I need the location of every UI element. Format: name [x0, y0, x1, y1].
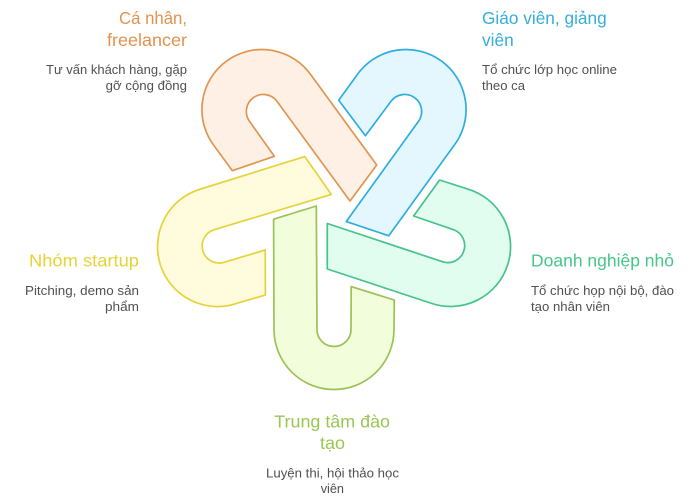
link: yellow [158, 157, 331, 307]
link: green [327, 180, 511, 306]
description: Cá nhân, freelancer: gỡ cộng đồng [106, 78, 187, 93]
heading: Doanh nghiệp nhỏ: Doanh nghiệp nhỏ [531, 251, 674, 271]
text block: Giáo viên, giảng viên [482, 8, 617, 93]
heading: Cá nhân, freelancer: Cá nhân, [119, 8, 187, 28]
heading: Giáo viên, giảng viên: viên [482, 30, 514, 50]
text block: Nhóm startup [25, 251, 139, 314]
description: Nhóm startup: Pitching, demo sản [25, 283, 139, 298]
link: lime [274, 206, 394, 390]
heading: Giáo viên, giảng viên: Giáo viên, giảng [482, 8, 607, 28]
description: Nhóm startup: phẩm [105, 299, 139, 314]
description: Doanh nghiệp nhỏ [531, 283, 674, 314]
description: Nhóm startup [25, 283, 139, 314]
description: Doanh nghiệp nhỏ: Tổ chức họp nội bộ, đào [531, 283, 674, 298]
interlocking link diagram [158, 34, 511, 389]
text block: Cá nhân, freelancer [46, 8, 187, 93]
description: Giáo viên, giảng viên: Tổ chức lớp học online [482, 62, 617, 77]
link: blue [301, 34, 499, 247]
heading: Cá nhân, freelancer: freelancer [107, 30, 187, 50]
heading: Trung tâm đào tạo: tạo [320, 433, 345, 453]
heading: Trung tâm đào tạo: Trung tâm đào [274, 412, 390, 432]
text block: Doanh nghiệp nhỏ [531, 251, 674, 314]
heading: Nhóm startup: Nhóm startup [29, 251, 139, 271]
description: Giáo viên, giảng viên [482, 62, 617, 93]
heading: Cá nhân, freelancer [107, 8, 187, 50]
description: Trung tâm đào tạo [266, 466, 399, 496]
link: orange [202, 50, 377, 201]
description: Trung tâm đào tạo: viên [321, 481, 344, 496]
heading: Trung tâm đào tạo [274, 412, 390, 453]
description: Trung tâm đào tạo: Luyện thi, hội thảo học [266, 466, 399, 481]
description: Cá nhân, freelancer: Tư vấn khách hàng, gặp [46, 62, 187, 77]
description: Cá nhân, freelancer [46, 62, 187, 93]
text block: Trung tâm đào tạo [266, 412, 399, 496]
description: Giáo viên, giảng viên: theo ca [482, 78, 526, 93]
heading: Giáo viên, giảng viên [482, 8, 607, 50]
description: Doanh nghiệp nhỏ: tạo nhân viên [531, 299, 610, 314]
